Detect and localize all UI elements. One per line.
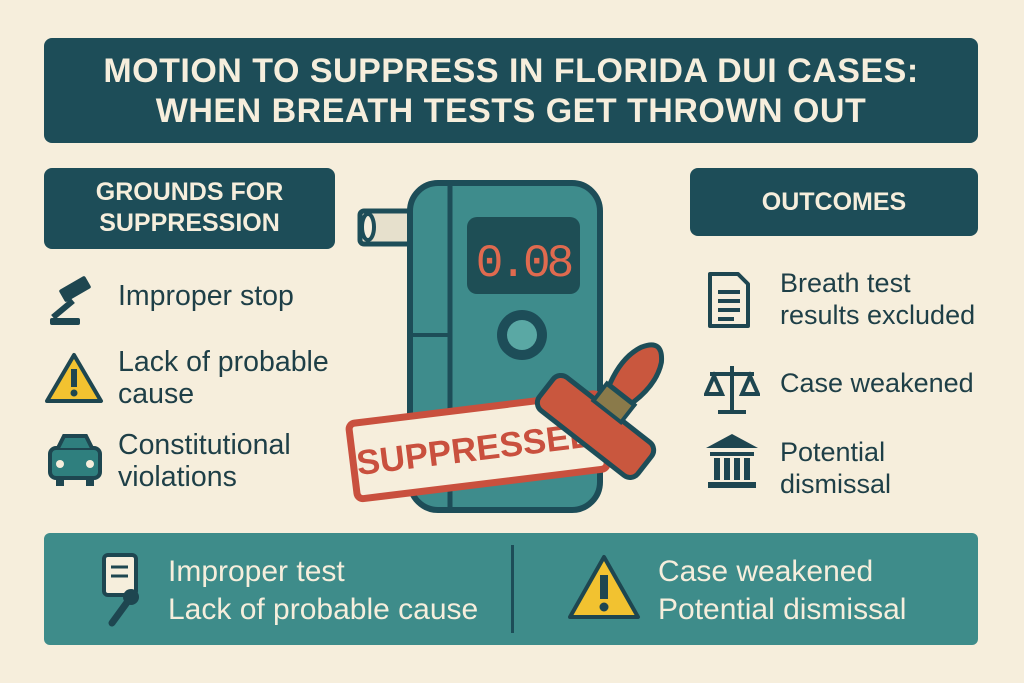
icon: courthouse bbox=[706, 434, 758, 488]
text: potential dismissal bbox=[780, 437, 891, 499]
text: improper test / lack of probable cause bbox=[168, 555, 478, 626]
button bbox=[497, 310, 547, 360]
heading: grounds for suppression: GROUNDS FOR bbox=[96, 178, 283, 206]
stamp bbox=[533, 308, 707, 481]
icon: gavel bbox=[50, 276, 91, 325]
text: improper stop: Improper stop bbox=[118, 280, 294, 312]
heading: outcomes: OUTCOMES bbox=[762, 188, 906, 216]
text: case weakened / potential dismissal: Potential dismissal bbox=[658, 593, 906, 626]
title: MOTION TO SUPPRESS IN FLORIDA DUI CASES: bbox=[103, 52, 919, 90]
text: lack of probable cause: Lack of probable bbox=[118, 346, 329, 378]
tube bbox=[360, 211, 422, 244]
icon: car bbox=[48, 434, 102, 486]
text: breath test results excluded bbox=[780, 268, 975, 330]
text: potential dismissal: Potential bbox=[780, 437, 885, 467]
text: lack of probable cause bbox=[118, 346, 329, 410]
text: breath test results excluded: Breath test bbox=[780, 268, 911, 298]
text: improper test / lack of probable cause: Improper test bbox=[168, 555, 345, 588]
display bbox=[467, 217, 580, 294]
icon: scales bbox=[704, 366, 760, 414]
heading: grounds for suppression: SUPPRESSION bbox=[99, 209, 280, 237]
icon: test document with mouthpiece bbox=[102, 553, 139, 626]
illustration: breathalyzer with stamp bbox=[346, 180, 664, 513]
text: case weakened / potential dismissal bbox=[658, 555, 906, 626]
heading: grounds for suppression bbox=[44, 168, 335, 249]
text: case weakened: Case weakened bbox=[780, 368, 974, 398]
bottom summary band bbox=[44, 533, 978, 645]
text: potential dismissal: dismissal bbox=[780, 469, 891, 499]
display: 0.08 bbox=[476, 238, 572, 290]
suppressed label: SUPPRESSED bbox=[354, 415, 597, 483]
text: improper test / lack of probable cause: Lack of probable cause bbox=[168, 593, 478, 626]
text: case weakened / potential dismissal: Case weakened bbox=[658, 555, 873, 588]
text: breath test results excluded: results excluded bbox=[780, 300, 975, 330]
icon: warning bbox=[568, 554, 640, 619]
icon: document bbox=[708, 272, 750, 328]
text: constitutional violations: Constitutional bbox=[118, 429, 291, 461]
heading: outcomes bbox=[690, 168, 978, 236]
body bbox=[410, 183, 600, 510]
icon: warning bbox=[45, 352, 104, 403]
suppressed label bbox=[348, 393, 608, 499]
text: constitutional violations: violations bbox=[118, 461, 237, 493]
title bbox=[44, 38, 978, 143]
text: lack of probable cause: cause bbox=[118, 378, 194, 410]
title: WHEN BREATH TESTS GET THROWN OUT bbox=[156, 92, 866, 130]
text: constitutional violations bbox=[118, 429, 291, 493]
